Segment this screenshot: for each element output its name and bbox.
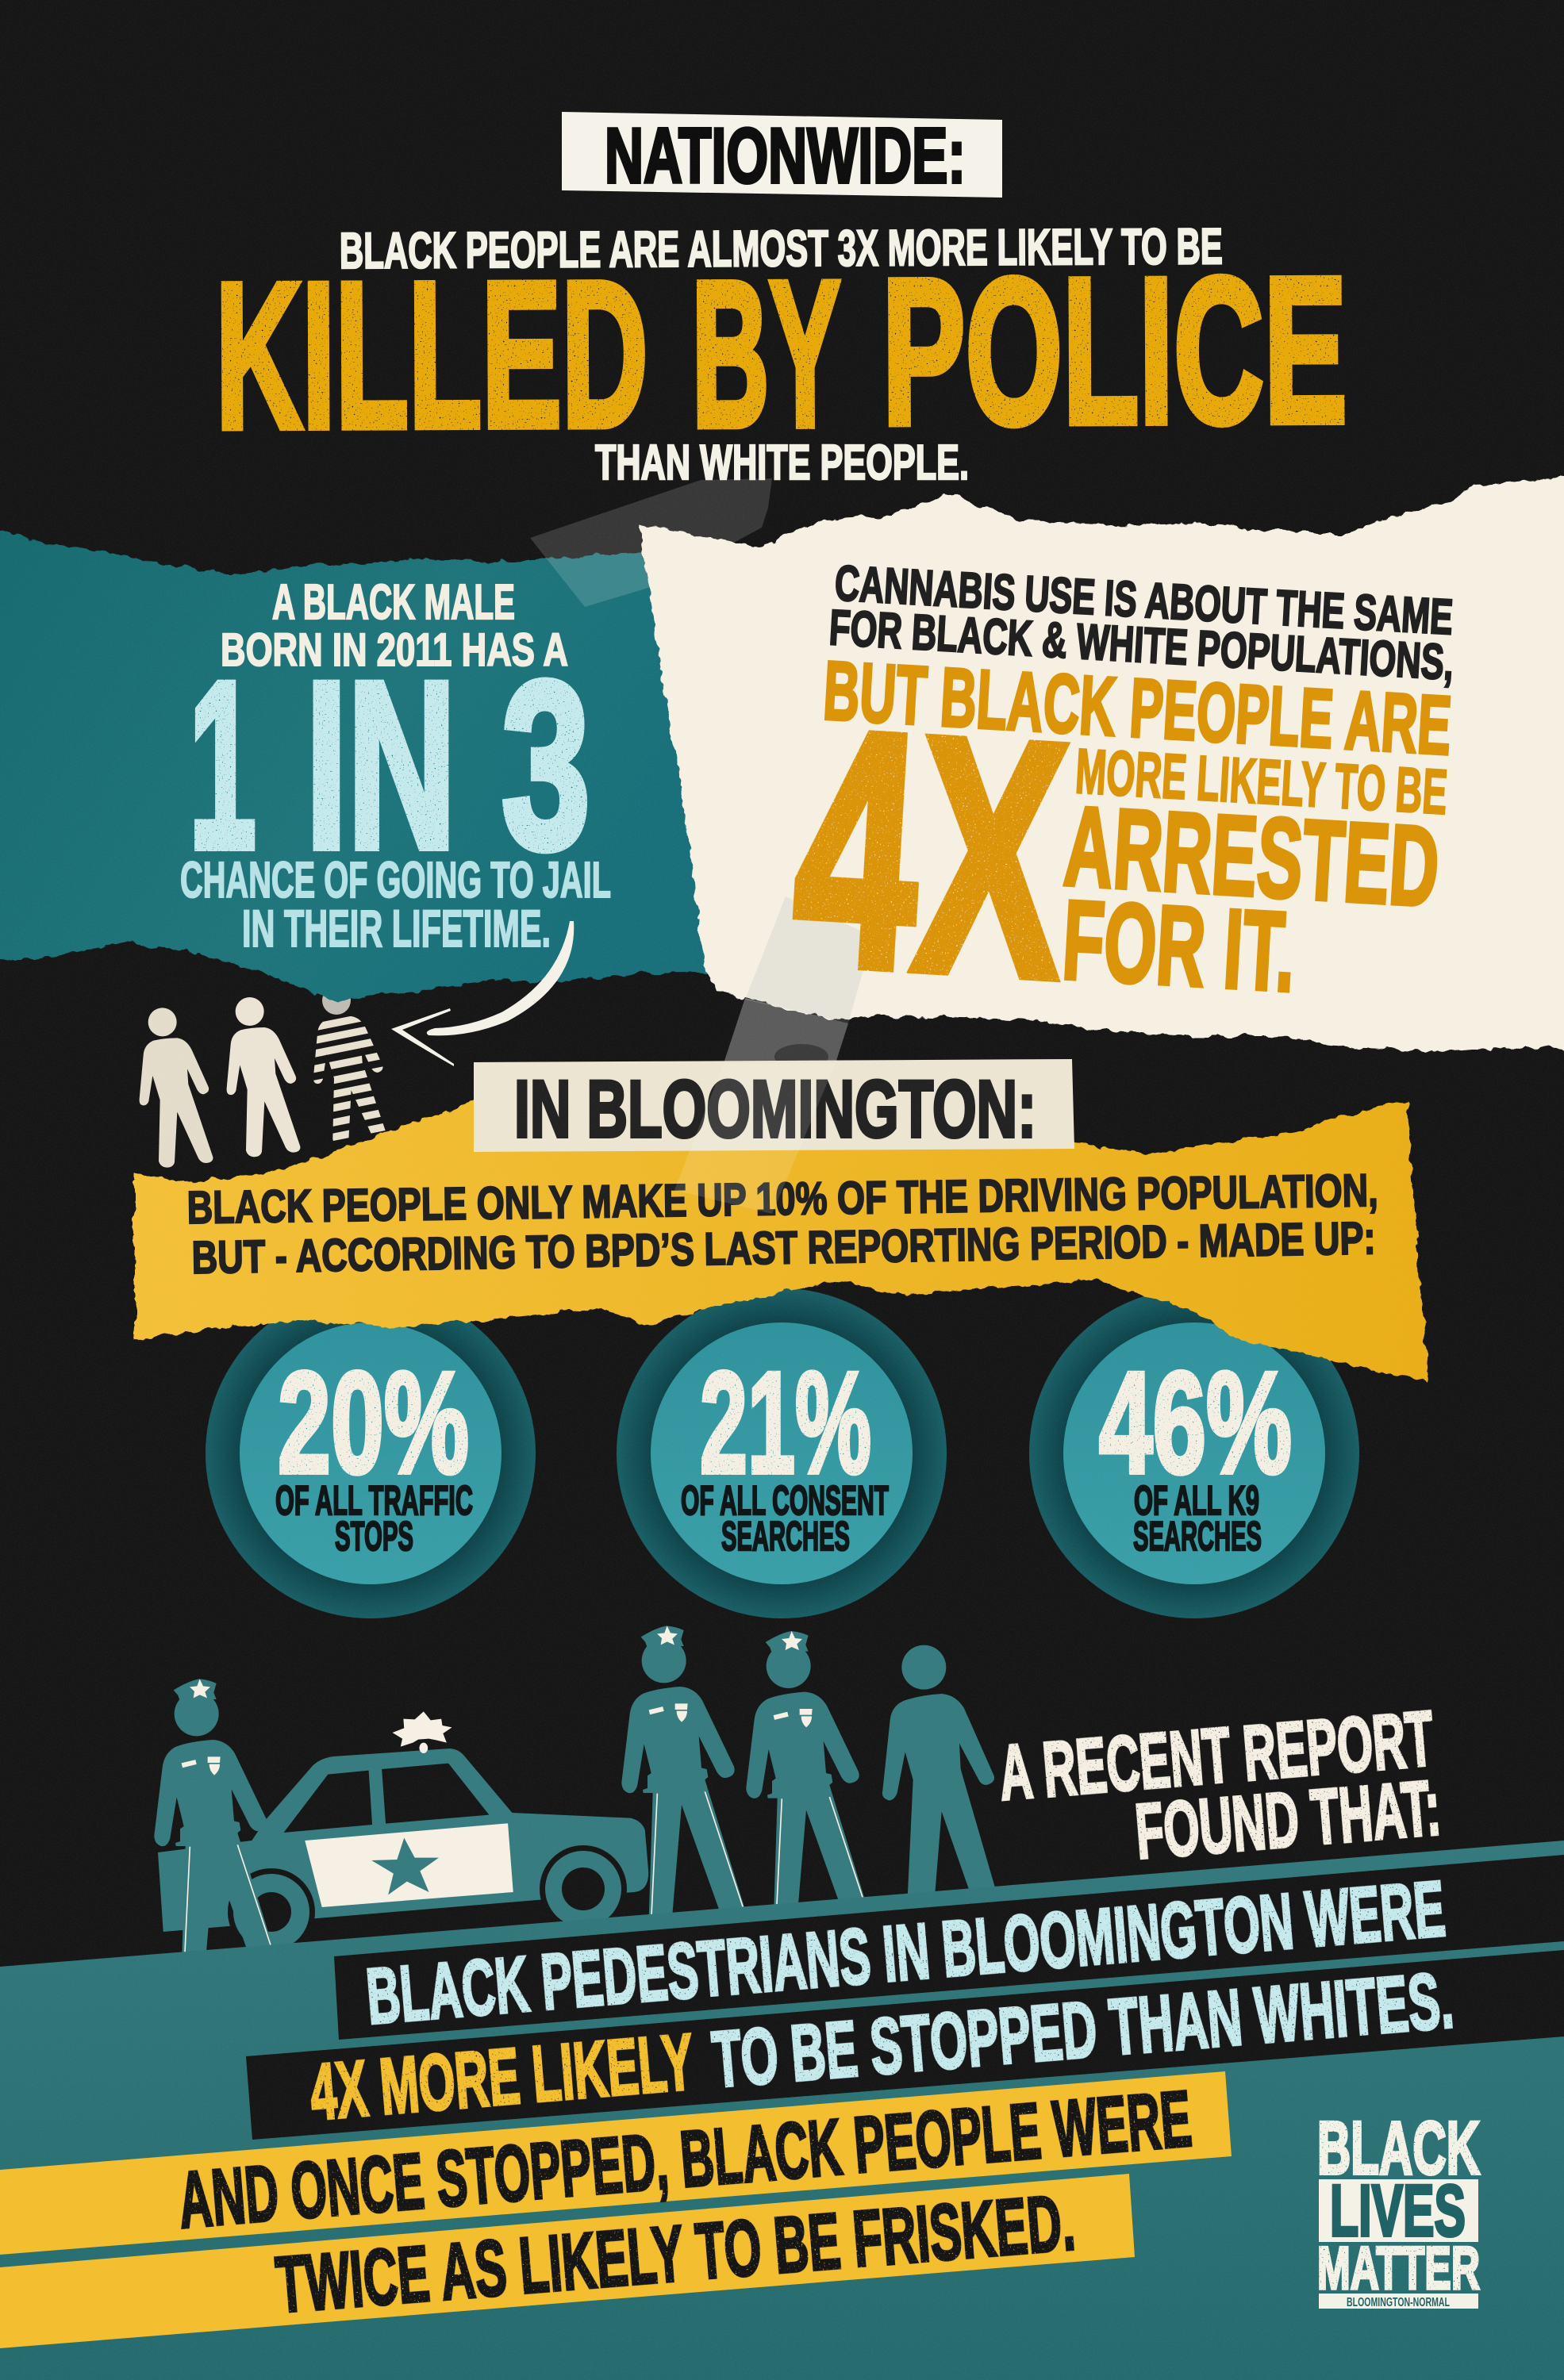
label: nationwide: NATIONWIDE: xyxy=(605,112,966,199)
text: in their lifetime: IN THEIR LIFETIME. xyxy=(242,899,551,958)
title block xyxy=(215,112,1347,490)
circle text: 21 percent: 21% xyxy=(700,1342,871,1503)
logo: black lives matter: MATTER xyxy=(1317,2235,1480,2302)
circle text: 20 percent: 20% xyxy=(278,1342,469,1503)
arrow xyxy=(391,921,574,1066)
circle text: 46 percent: SEARCHES xyxy=(1133,1514,1262,1560)
stat: 1 in 3: 3 xyxy=(501,631,590,898)
icon: pedestrian xyxy=(882,1645,1000,1904)
stripe: once stopped xyxy=(0,2071,1232,2255)
tape: lower, over label and yellow xyxy=(674,1063,836,1214)
icons: police officers and pedestrian xyxy=(154,1626,1000,1981)
text: a black male: A BLACK MALE xyxy=(272,575,515,630)
logo: black lives matter: LIVES xyxy=(1330,2171,1466,2251)
circle text: 21 percent xyxy=(681,1342,889,1560)
circle: 46% xyxy=(1029,1288,1359,1618)
text: born in 2011: BORN IN 2011 HAS A xyxy=(221,624,568,676)
circle text: 46 percent: 46% xyxy=(1099,1342,1292,1503)
stripe: 4x more likely xyxy=(246,1950,1564,2140)
icon: person 1 xyxy=(140,1008,213,1168)
circle: 20% xyxy=(206,1288,536,1618)
text: yellow highlight: 4X MORE LIKELY xyxy=(307,2017,697,2137)
circle: 21% xyxy=(617,1288,947,1618)
text: for it: FOR IT. xyxy=(1059,877,1299,1015)
icon: officer 2 xyxy=(621,1626,747,1928)
circle text: 20 percent xyxy=(275,1342,473,1560)
text: than white people: THAN WHITE PEOPLE. xyxy=(595,436,969,490)
text block: recent report xyxy=(996,1695,1443,1875)
text block: cannabis xyxy=(786,555,1455,1048)
icons: three people xyxy=(140,986,386,1168)
text block: driving population xyxy=(186,1165,1378,1284)
circle text: 20 percent: STOPS xyxy=(335,1514,413,1560)
stat: 1 in 3: IN xyxy=(305,631,456,898)
stat: 1 in 3 xyxy=(189,631,590,898)
text block: 1 in 3 xyxy=(180,575,611,958)
panel: yellow torn paper xyxy=(135,1100,1428,1382)
stripe: frisked xyxy=(0,2174,1135,2348)
circle text: 20 percent: OF ALL TRAFFIC xyxy=(275,1478,473,1524)
circle text: 21 percent: OF ALL CONSENT xyxy=(681,1478,889,1524)
headline: killed by police: BY xyxy=(691,237,841,470)
icon: police car xyxy=(158,1711,648,1956)
tape tint on paper xyxy=(745,896,873,1023)
icon: officer 1 xyxy=(154,1679,280,1981)
icon: striped prisoner xyxy=(313,996,386,1141)
tape: upper xyxy=(530,478,772,607)
logo: black lives matter: BLOOMINGTON-NORMAL xyxy=(1347,2296,1450,2309)
panel: teal ground xyxy=(0,1841,1564,2380)
circle text: 21 percent: SEARCHES xyxy=(721,1514,850,1560)
panel: cream torn paper xyxy=(639,476,1564,1052)
logo: black lives matter xyxy=(1317,2106,1480,2309)
panel: teal torn paper xyxy=(0,528,710,1001)
tape: lower, over black xyxy=(724,998,848,1069)
headline: killed by police xyxy=(215,233,1347,472)
stat: 1 in 3: 1 xyxy=(189,631,256,898)
label: in bloomington xyxy=(474,1059,1074,1154)
circle text: 46 percent: OF ALL K9 xyxy=(1134,1478,1259,1524)
circle text: 46 percent xyxy=(1099,1342,1292,1560)
stat: 4x: 4X xyxy=(786,661,1075,1048)
label: in bloomington: IN BLOOMINGTON: xyxy=(514,1064,1036,1154)
icon: officer 3 xyxy=(746,1631,872,1933)
headline: killed by police: KILLED xyxy=(215,238,648,472)
text: chance of going to jail: CHANCE OF GOING TO JAIL xyxy=(180,851,611,908)
stat circles xyxy=(206,1288,1359,1618)
icon: person 2 xyxy=(227,997,300,1157)
